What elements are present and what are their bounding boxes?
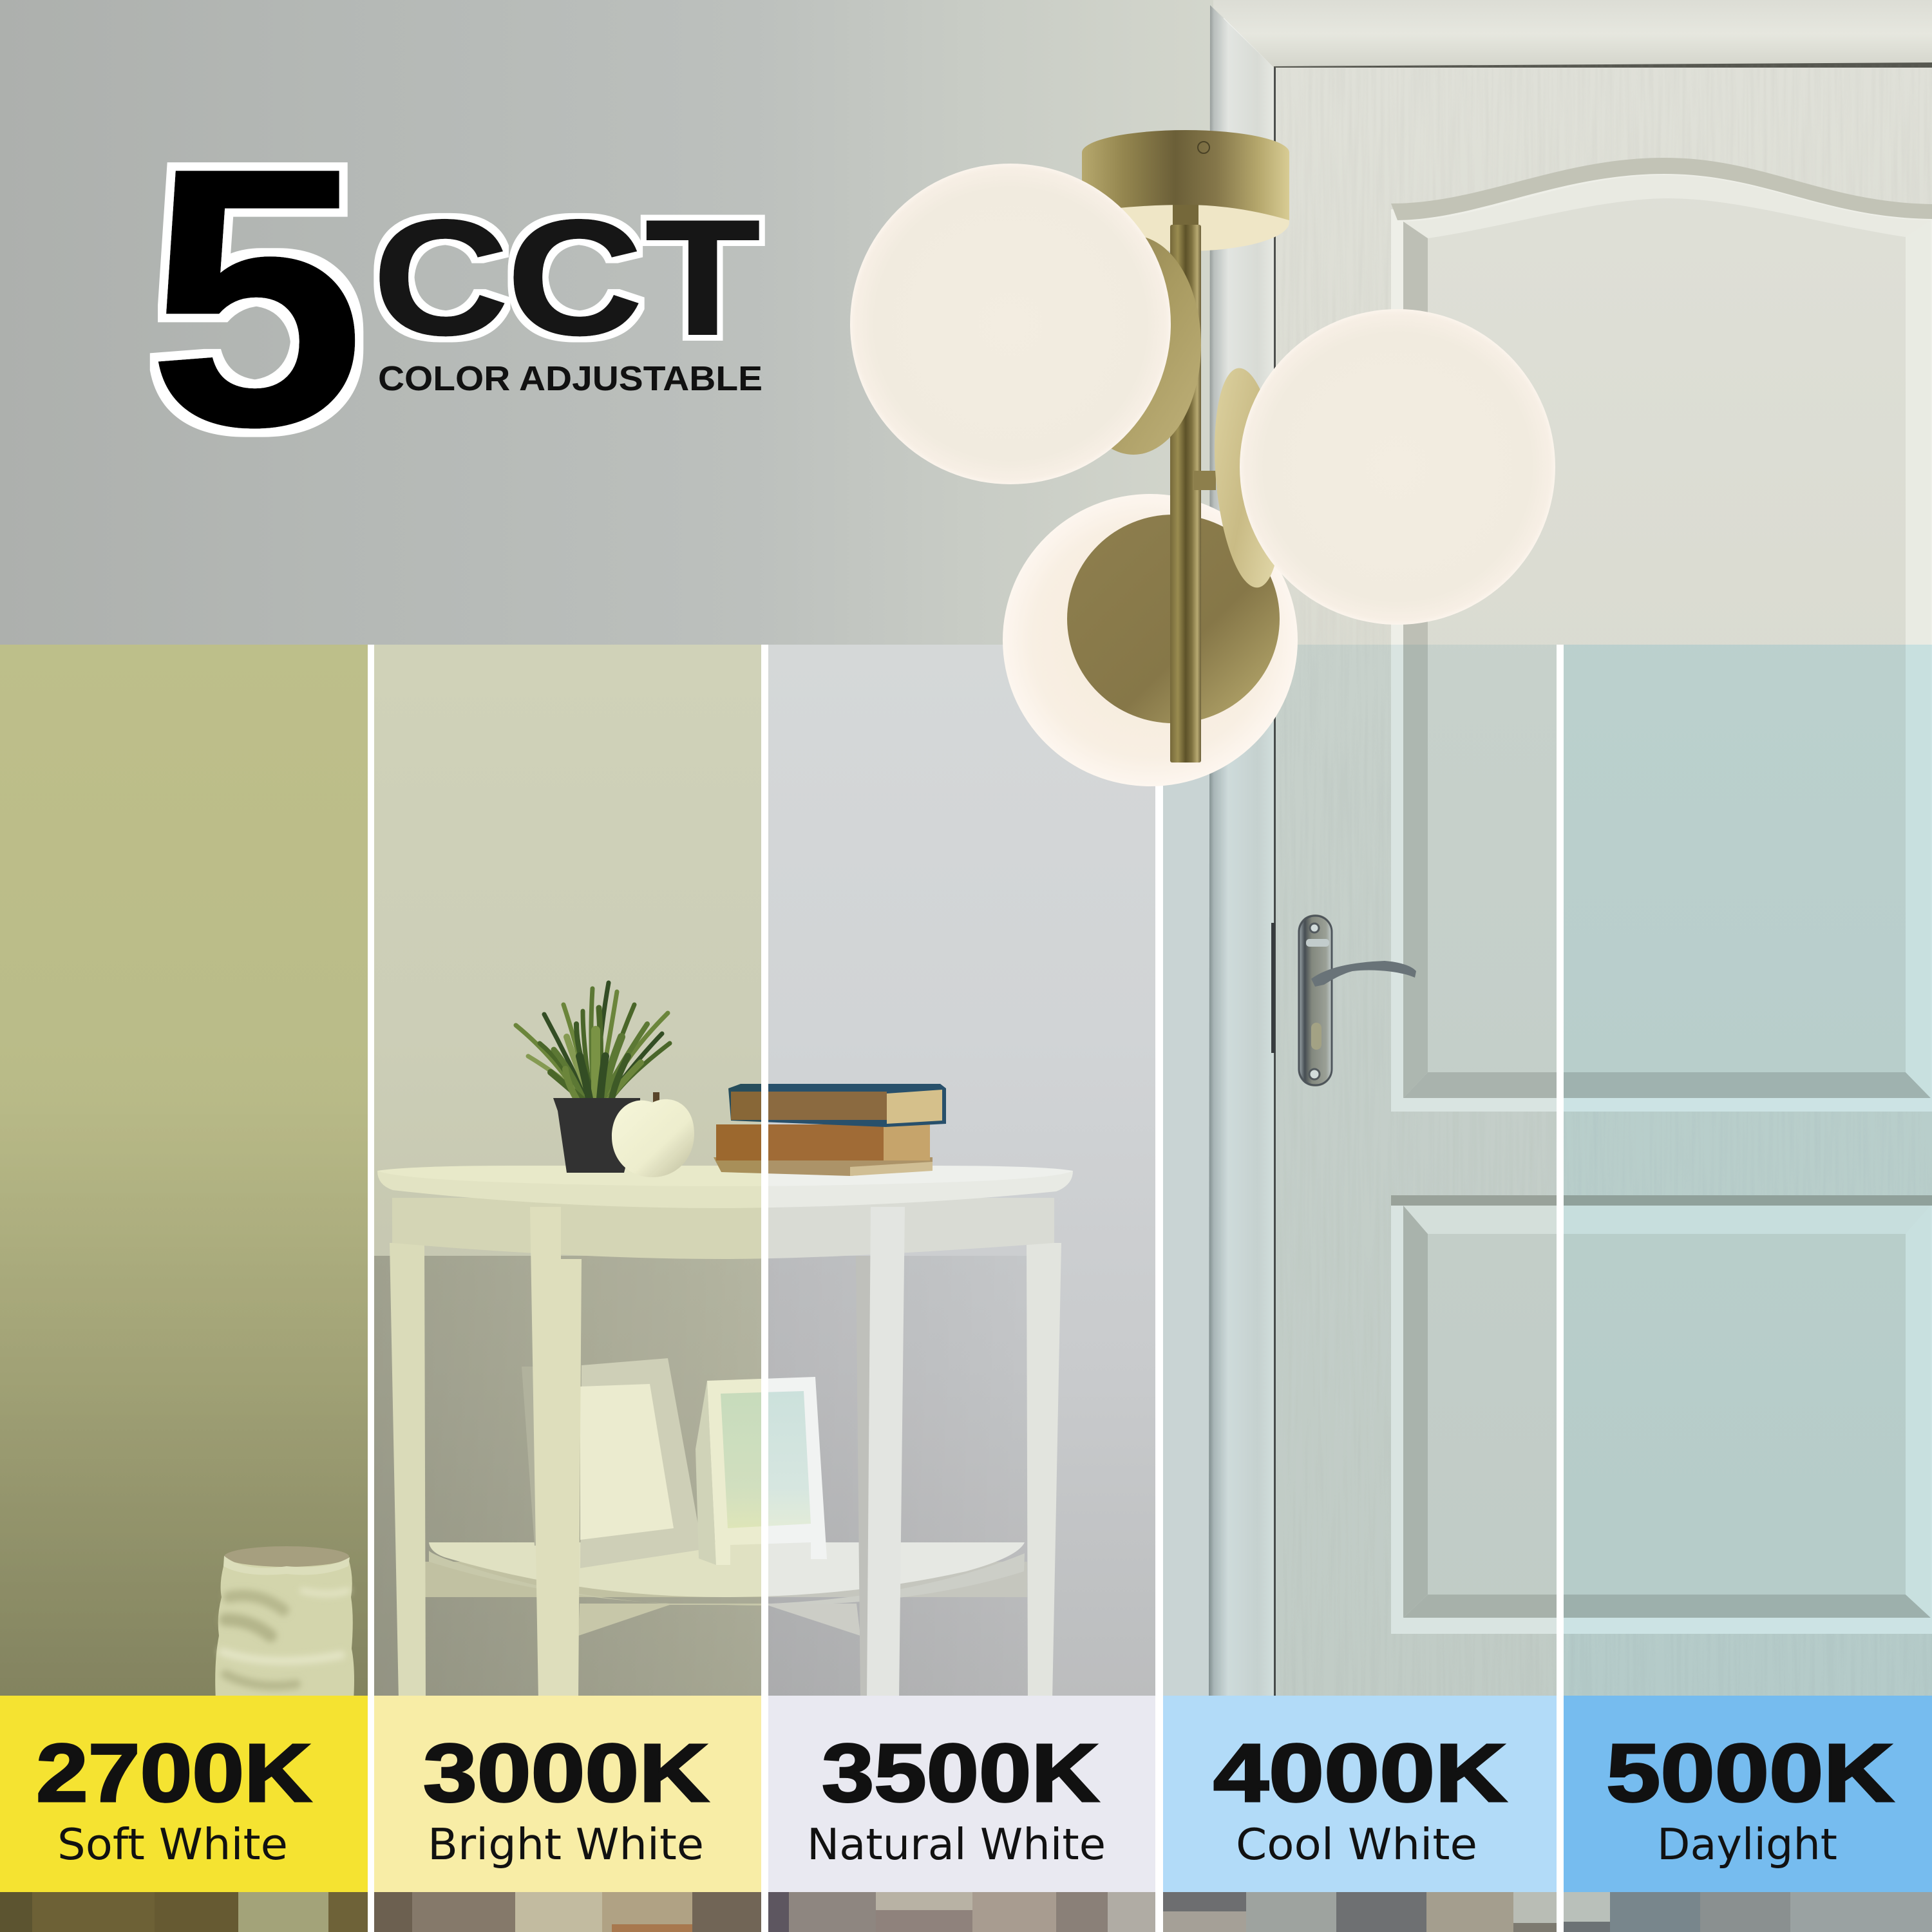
CCT letters: CCT <box>372 186 761 370</box>
book body <box>714 1157 933 1176</box>
bottom book <box>714 1157 933 1176</box>
white picture frame <box>696 1377 827 1565</box>
leg face <box>867 1207 905 1700</box>
wall shade: corner near vase <box>0 1095 374 1700</box>
top bevel <box>1403 175 1931 238</box>
big numeral: 5 <box>146 90 366 504</box>
swatch: 3000K bright white: 3000K <box>423 1727 709 1819</box>
floor strip 3 <box>768 1892 1155 1932</box>
frame top trim <box>1213 0 1932 68</box>
overlay: 4000K cool white <box>1162 645 1557 1701</box>
book cover <box>728 1084 946 1127</box>
frame side <box>1209 5 1274 1700</box>
upper left crescent disc <box>1066 236 1201 455</box>
silver picture frame <box>522 1358 703 1568</box>
shelf brace <box>578 1604 860 1636</box>
wall: upper band <box>0 0 1224 645</box>
swatch: 5000K daylight <box>1564 1696 1932 1892</box>
overlay: 5000K daylight <box>1563 645 1932 1701</box>
table edge <box>377 1171 1073 1208</box>
wall shade: beneath table <box>374 1256 1044 1700</box>
table surface <box>377 1166 1073 1186</box>
shelf rail <box>425 1562 1027 1597</box>
swatch: 2700K soft white <box>0 1696 368 1892</box>
apple stem <box>653 1092 659 1103</box>
top bevel <box>1403 1206 1931 1234</box>
swatch: 4000K cool white: Cool White <box>1236 1819 1477 1870</box>
lower screw <box>1309 1069 1320 1079</box>
shelf top <box>429 1542 1025 1597</box>
panel outer band <box>1391 1195 1932 1634</box>
upper screw <box>1310 923 1319 933</box>
floor strip 5 <box>1564 1892 1932 1932</box>
top book <box>728 1084 946 1127</box>
door frame <box>1209 0 1932 1700</box>
swatch: 5000K daylight: Daylight <box>1657 1819 1837 1870</box>
back plate <box>1298 914 1333 1086</box>
vase body <box>215 1558 354 1700</box>
canopy underside <box>1082 193 1289 251</box>
ceramic vase <box>215 1546 354 1700</box>
frame picture area <box>580 1384 674 1540</box>
left bevel <box>1403 222 1428 1098</box>
door surface <box>1274 68 1932 1700</box>
right bevel <box>1906 220 1931 1098</box>
upper left globe <box>850 164 1171 484</box>
door leaf <box>1271 68 1932 1700</box>
right bevel <box>1906 1206 1931 1618</box>
top shadow line <box>1391 1195 1932 1206</box>
leg shadow side <box>856 1256 873 1700</box>
swatch: 3000K bright white: Bright White <box>428 1819 704 1870</box>
book pages <box>887 1090 942 1124</box>
arched moulding <box>1391 158 1932 220</box>
shelf edge <box>429 1551 1025 1605</box>
title: 5 CCT <box>146 90 761 504</box>
door latch plate <box>1271 923 1275 1053</box>
ceiling lamp <box>850 130 1555 786</box>
frame stand <box>696 1381 716 1565</box>
frame head shadow <box>1274 62 1932 70</box>
ceramic apple <box>612 1092 694 1177</box>
right connector <box>1194 471 1216 490</box>
table top <box>377 1166 1073 1208</box>
colour temperature overlays <box>0 645 1932 1701</box>
door wood grain <box>1275 70 1932 1699</box>
potted plant <box>516 983 670 1173</box>
swatch: 2700K soft white: Soft White <box>57 1819 288 1870</box>
upper door panel <box>1391 158 1932 1112</box>
lower disc <box>1067 515 1280 723</box>
vase lip <box>223 1556 350 1575</box>
swatch: 4000K cool white: 4000K <box>1213 1727 1507 1819</box>
door edge line <box>1274 68 1276 1700</box>
door handle <box>1298 914 1416 1086</box>
back left leg <box>390 1243 426 1700</box>
wall: lower band <box>0 645 1224 1701</box>
inner panel <box>1428 198 1906 1072</box>
front right leg <box>856 1207 905 1700</box>
shelf board <box>429 1542 1025 1605</box>
panel outer band <box>1391 166 1932 1112</box>
frame body <box>707 1377 827 1565</box>
swatch: 4000K cool white <box>1163 1696 1557 1892</box>
middle book <box>716 1124 930 1160</box>
overlay: 2700K soft white <box>0 645 368 1701</box>
swatch: 5000K daylight: 5000K <box>1606 1727 1894 1819</box>
canopy band <box>1082 130 1289 220</box>
left bevel <box>1403 1206 1428 1618</box>
lamp rod <box>1170 225 1201 762</box>
floor strip 2 <box>374 1892 761 1932</box>
plant leaves <box>516 983 670 1101</box>
right disc <box>1206 365 1290 591</box>
swatch: 3000K bright white <box>374 1696 761 1892</box>
plate rim <box>1299 916 1332 1085</box>
lever <box>1311 961 1416 987</box>
console table <box>377 983 1073 1700</box>
overlay: 3500K natural white <box>768 645 1156 1701</box>
swatch: 3500K natural white: Natural White <box>807 1819 1106 1870</box>
keyhole <box>1311 1023 1321 1050</box>
book spine <box>731 1092 887 1120</box>
subtitle: color adjustable: COLOR ADJUSTABLE <box>378 359 762 398</box>
floor strip 4 <box>1163 1892 1557 1932</box>
front left leg <box>530 1207 582 1700</box>
wall: section next to door <box>1155 645 1213 1701</box>
apron <box>392 1198 1054 1259</box>
swatch: 3500K natural white: 3500K <box>822 1727 1099 1819</box>
inner panel <box>1428 1234 1906 1595</box>
wood floor <box>0 1892 1932 1932</box>
right globe <box>1240 309 1555 625</box>
swatch: 3500K natural white <box>768 1696 1155 1892</box>
frame back edge <box>522 1367 541 1546</box>
lamp rod neck <box>1173 205 1198 228</box>
frame glass <box>721 1391 811 1528</box>
floor strip 1 <box>0 1892 368 1932</box>
bottom bevel <box>1403 1595 1931 1618</box>
stack of books <box>714 1084 946 1176</box>
apple body <box>612 1099 694 1177</box>
canopy screw <box>1198 142 1209 153</box>
white strip dividers <box>368 645 1564 1932</box>
vase folds <box>222 1591 348 1686</box>
book pages <box>884 1124 930 1160</box>
book pages <box>850 1162 933 1176</box>
lower door panel <box>1391 1195 1932 1634</box>
book spine <box>716 1124 884 1160</box>
pot <box>553 1098 640 1173</box>
frame body <box>580 1358 703 1568</box>
bottom bevel <box>1403 1072 1931 1098</box>
swatch: 2700K soft white: 2700K <box>36 1727 312 1819</box>
lower globe <box>1003 494 1298 786</box>
back right leg <box>1027 1243 1061 1700</box>
vase inner rim <box>224 1546 349 1567</box>
overlay: 3000K bright white <box>374 645 762 1701</box>
plate top cap <box>1306 939 1329 947</box>
